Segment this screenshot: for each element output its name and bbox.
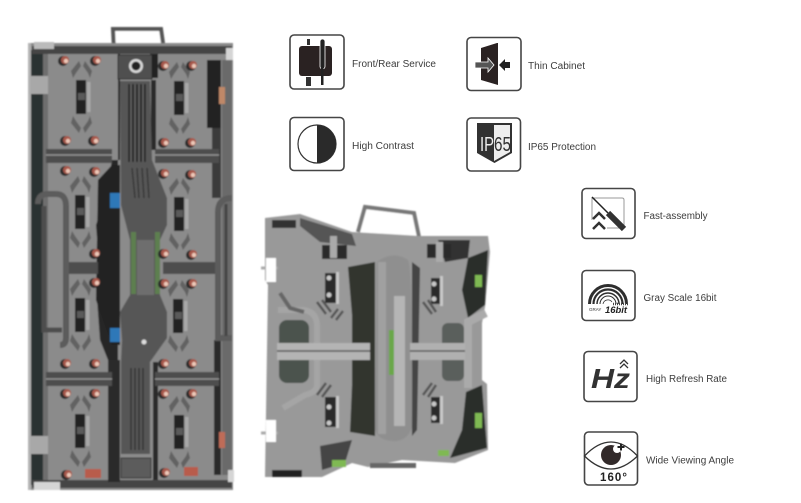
label: fast-assembly: Fast-assembly — [644, 211, 708, 222]
icon: IP65 shield: 65 — [494, 134, 511, 156]
dark shadows around centre — [96, 54, 120, 480]
cabinet body — [265, 214, 490, 477]
label: thin cabinet: Thin Cabinet — [528, 61, 585, 72]
icon: front/rear service — [290, 35, 344, 89]
label: gray scale 16bit: Gray Scale 16bit — [644, 293, 717, 304]
chevrons — [317, 300, 436, 397]
carrying handle — [358, 207, 419, 237]
carrying handle — [113, 29, 164, 50]
icon: thin cabinet — [467, 38, 521, 90]
feature: front/rear service — [290, 35, 436, 89]
centre capsule cover — [375, 255, 412, 441]
centre block with round cover — [118, 55, 152, 79]
right window and bent handle — [442, 323, 464, 381]
feature: fast-assembly — [582, 188, 708, 238]
side lock pins — [261, 268, 278, 433]
feature: thin cabinet — [467, 38, 585, 90]
label: front/rear service: Front/Rear Service — [352, 59, 436, 70]
right LED cabinet, angled rear view — [261, 207, 490, 477]
feature: high refresh rate — [584, 352, 727, 402]
feature: gray scale — [582, 270, 717, 320]
horizontal beams — [46, 149, 219, 386]
icon: screwdriver and chevrons — [582, 188, 635, 238]
icon: eye with 160 degrees: 160° — [600, 472, 627, 484]
cabinet body — [28, 43, 233, 490]
left window and bent handle — [279, 320, 309, 383]
green latches — [332, 275, 482, 467]
label: IP65 protection: IP65 Protection — [528, 142, 596, 153]
icon: Hz with chevrons: Hz — [591, 363, 630, 394]
label: wide viewing angle: Wide Viewing Angle — [646, 456, 734, 466]
horizontal beams — [277, 343, 370, 360]
feature: high contrast — [290, 118, 414, 170]
top posts — [322, 244, 451, 259]
dark frame shading — [462, 250, 488, 318]
module latches — [71, 61, 92, 133]
icon: half-filled circle — [290, 118, 344, 170]
icon: concentric gray scale arcs: 16bit — [605, 305, 628, 315]
centre spine — [120, 81, 167, 454]
module latches — [325, 273, 440, 427]
side handles — [38, 194, 66, 345]
icon: IP65 shield — [467, 118, 520, 171]
label: high refresh rate: High Refresh Rate — [646, 374, 727, 385]
red mounting pins — [60, 136, 71, 146]
icon: Hz with chevrons — [584, 352, 637, 402]
left LED cabinet, rear view — [28, 29, 234, 490]
label: high contrast: High Contrast — [352, 141, 414, 152]
bottom foot — [370, 463, 416, 468]
top and bottom corner brackets — [30, 76, 48, 94]
blue connectors — [110, 193, 120, 208]
icon: eye with 160 degrees — [584, 432, 638, 485]
feature: IP65 protection — [467, 118, 596, 171]
icon: concentric gray scale arcs — [582, 270, 635, 320]
icon: IP65 shield: IP — [480, 134, 494, 156]
icon: concentric gray scale arcs: GRAY — [589, 307, 601, 312]
feature: wide viewing angle — [584, 432, 734, 485]
